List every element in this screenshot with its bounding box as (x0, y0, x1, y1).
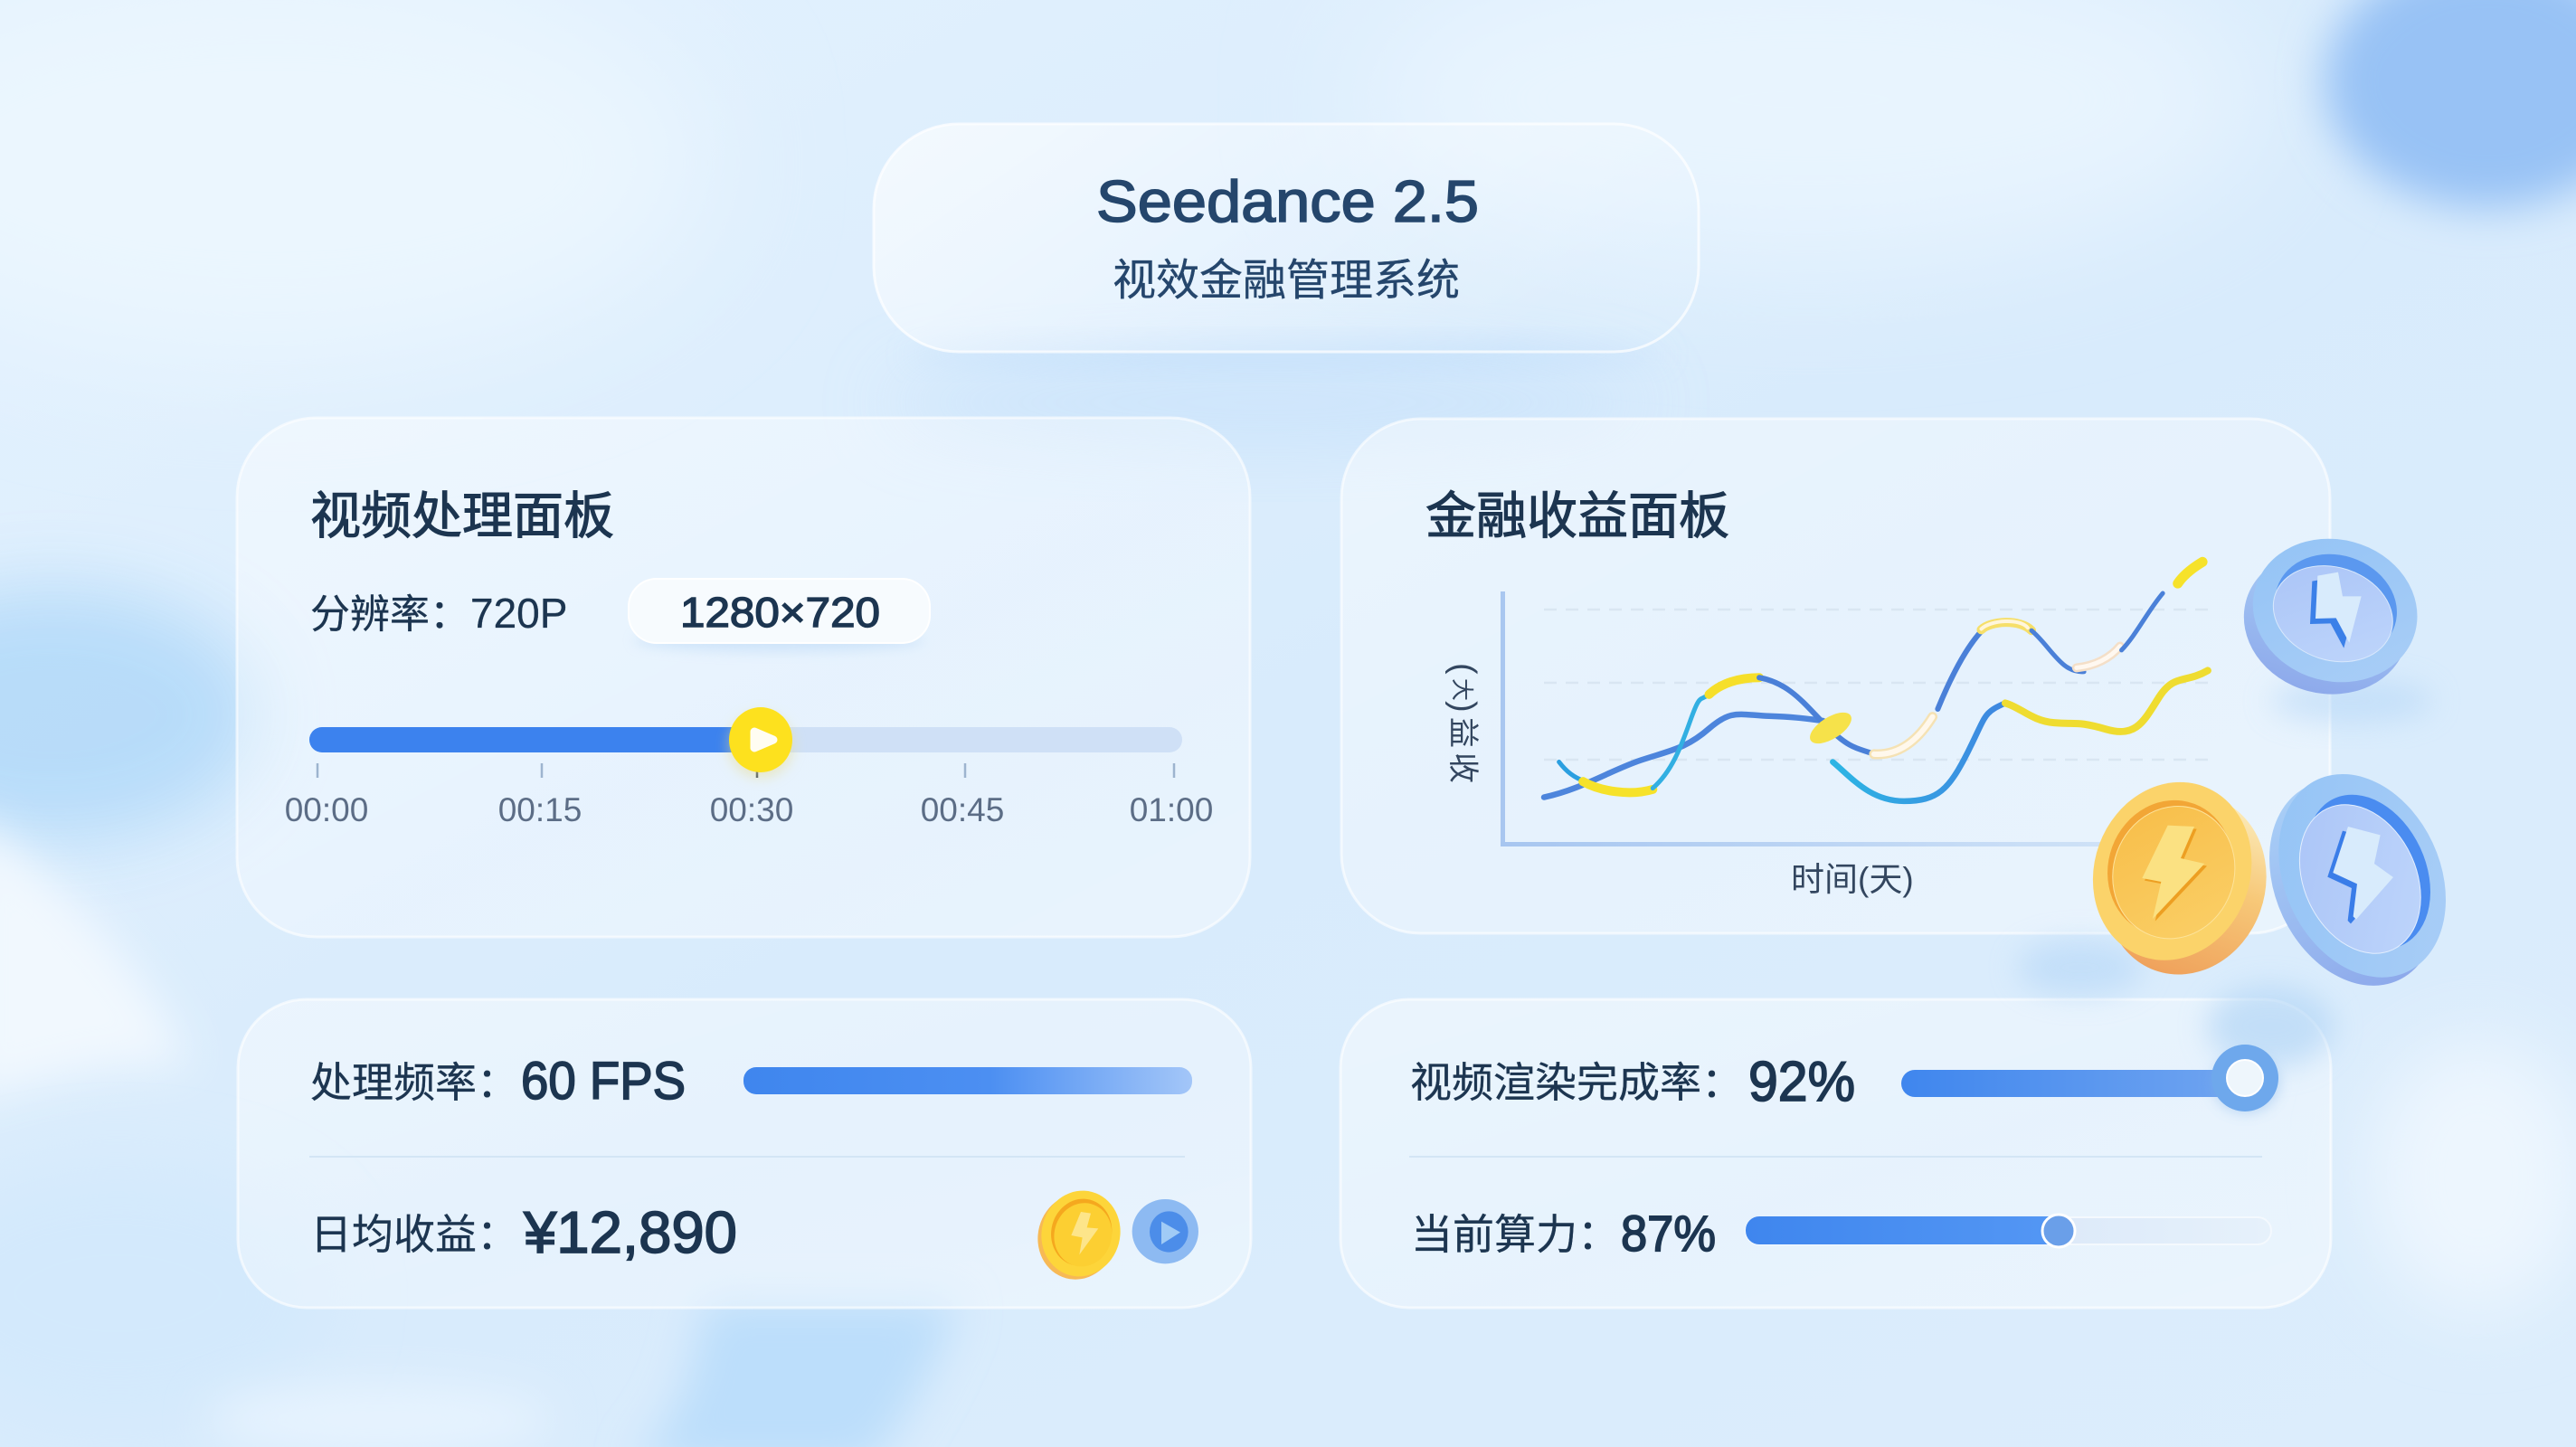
line chart (1501, 562, 2215, 846)
panel: fps and daily income (238, 999, 1251, 1308)
heading: video panel: 视频处理面板 (310, 487, 614, 544)
compute bar with knob (1746, 1215, 2271, 1247)
y axis label: ) (1444, 701, 1482, 713)
y axis label: ( (1444, 663, 1482, 675)
subtitle: 视效金融管理系统 (1113, 257, 1460, 305)
render rate value: 92% (1748, 1051, 1855, 1113)
fps bar (743, 1067, 1192, 1094)
timeline labels: 00:15 (498, 791, 582, 828)
icon: lower blue lightning coin (2238, 747, 2477, 1013)
resolution pill (629, 579, 930, 651)
timeline labels: 01:00 (1130, 791, 1213, 828)
coin shadows (2017, 679, 2433, 995)
y axis label: 大 (1449, 678, 1474, 701)
timeline labels: 00:00 (285, 791, 368, 828)
title: Seedance 2.5 (1096, 168, 1479, 234)
heading: finance panel: 金融收益面板 (1425, 487, 1729, 544)
timeline labels: 00:30 (710, 791, 793, 828)
panel: video processing (237, 418, 1250, 937)
panel: render rate and computing power (1340, 986, 2334, 1308)
y axis label: 益 (1445, 717, 1480, 748)
resolution pill: 1280×720 (680, 589, 880, 636)
render rate label: 视频渲染完成率： (1410, 1059, 1743, 1106)
icon: top blue coin (2228, 521, 2433, 713)
icon: small blue play button (1132, 1199, 1198, 1263)
income label: 日均收益： (310, 1211, 518, 1258)
resolution label: 720P (470, 590, 567, 637)
icon: gold lightning coin (2069, 760, 2291, 998)
compute value: 87% (1621, 1205, 1716, 1262)
fps value: 60 FPS (521, 1052, 686, 1111)
y axis label: 收 (1445, 752, 1480, 783)
render rate bar with knob (1901, 1045, 2279, 1113)
video timeline slider (309, 707, 1182, 778)
icon: small gold coin (1028, 1182, 1130, 1289)
panel: finance earnings (1341, 419, 2330, 933)
x axis label: 时间(天) (1791, 861, 1914, 898)
timeline labels (285, 791, 1213, 828)
resolution label: 分辨率： (310, 592, 469, 637)
fps label: 处理频率： (310, 1059, 518, 1106)
compute label: 当前算力： (1411, 1211, 1619, 1258)
panel: title header (874, 124, 1699, 367)
income value: ¥12,890 (523, 1199, 737, 1265)
timeline labels: 00:45 (921, 791, 1004, 828)
